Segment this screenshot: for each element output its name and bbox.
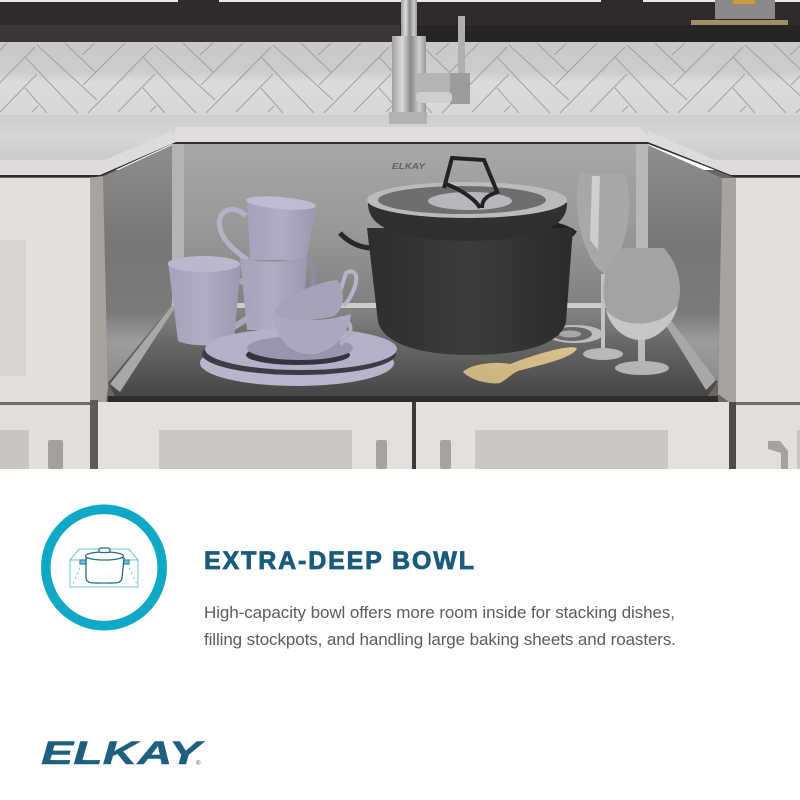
left cabinets: [0, 178, 90, 469]
description text: High-capacity bowl offers more room inside for stacking dishes,: [204, 603, 675, 622]
front mug: [168, 256, 255, 345]
stainless trim: [88, 176, 736, 469]
right cabinets: [736, 178, 800, 469]
sink brand mark: ELKAY: [392, 162, 426, 171]
window sill band: [0, 0, 800, 42]
sink floor: [108, 303, 718, 402]
tall wine glass: [577, 173, 629, 360]
icon: pot in deep bowl: [46, 509, 162, 626]
center cabinets: [98, 402, 729, 469]
stock pot with lid: [340, 158, 575, 355]
kitchen photo: [0, 0, 800, 469]
herringbone backsplash: [0, 42, 800, 115]
description text: filling stockpots, and handling large baking sheets and roasters.: [204, 630, 676, 649]
top mug: [219, 194, 316, 260]
sink back wall: [172, 144, 648, 308]
drain: [547, 325, 603, 343]
pot body: [367, 228, 573, 355]
faucet: [389, 0, 470, 124]
stacked teacups: [272, 272, 356, 354]
countertop: [0, 115, 800, 177]
icon ring: [46, 509, 162, 626]
stacked mugs: [168, 194, 316, 345]
Elkay logo: ®: [196, 760, 201, 767]
lid handle: [444, 158, 498, 194]
wooden spoon: [463, 347, 577, 383]
upper pot: [368, 203, 567, 241]
heading: EXTRA-DEEP BOWL: [204, 547, 474, 575]
lid: [367, 182, 567, 218]
sink side walls: [103, 144, 722, 385]
Elkay logo: [41, 735, 205, 771]
balloon glass: [604, 248, 680, 375]
pot handles: [340, 224, 575, 248]
icon pot: [80, 548, 129, 583]
lower mug: [240, 256, 314, 330]
plates: [200, 328, 397, 386]
description text: [204, 603, 676, 649]
icon sink outline: [70, 549, 138, 587]
Elkay logo: ELKAY: [41, 735, 205, 771]
